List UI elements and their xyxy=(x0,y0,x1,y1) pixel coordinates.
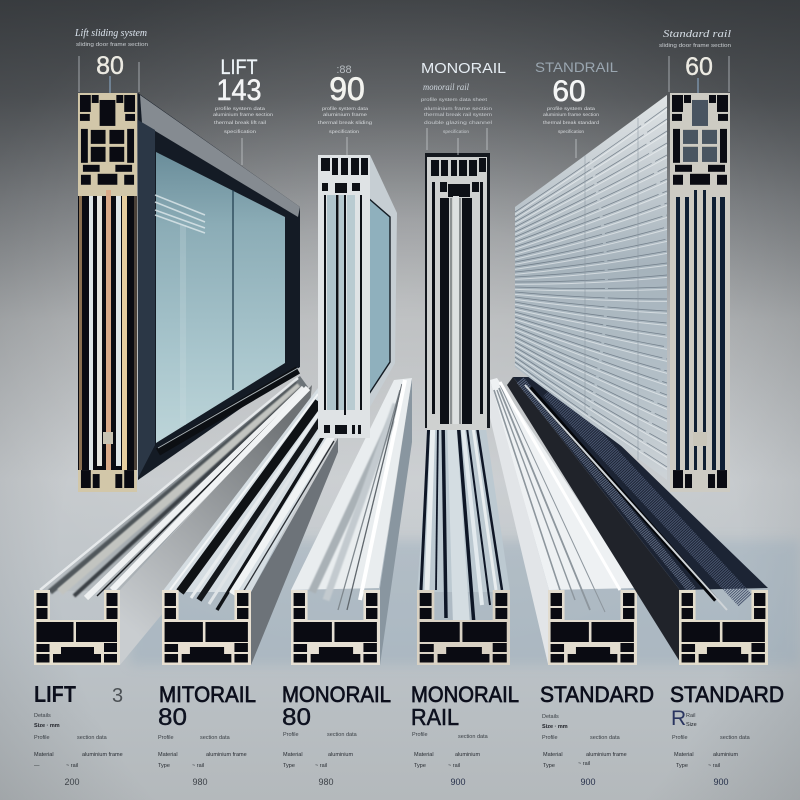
rail 2 cross-section xyxy=(162,590,251,665)
bottom label: Monorail Rail xyxy=(411,682,519,787)
window frame xyxy=(138,93,300,480)
rail 3 top surface xyxy=(291,378,412,590)
window panel: Lift 80 xyxy=(138,93,300,480)
textured wall panel xyxy=(515,95,667,480)
description: section data xyxy=(590,735,621,741)
heading: STANDARD xyxy=(670,682,784,707)
rail 1 side face xyxy=(120,385,312,665)
description: profile system data xyxy=(215,106,265,112)
bottom label: Standard R: Rail xyxy=(686,713,695,719)
heading: MONORAIL xyxy=(282,682,391,707)
description xyxy=(542,714,627,769)
rail 6 side face xyxy=(507,377,680,662)
bottom label: Monorail 80 xyxy=(282,682,391,787)
description: aluminium xyxy=(328,752,353,758)
small caption: sliding door frame section xyxy=(659,43,731,49)
description: Material xyxy=(674,752,694,758)
profile: 90 window xyxy=(318,155,397,438)
description: — xyxy=(34,763,40,769)
heading: LIFT xyxy=(220,56,258,79)
description: Type xyxy=(158,763,170,769)
number: 80 xyxy=(158,704,187,731)
description: thermal break sliding xyxy=(318,120,372,126)
description: specification xyxy=(224,129,256,135)
description: thermal break lift rail xyxy=(214,120,266,126)
top label: Standrail 60 xyxy=(535,59,618,158)
rail 4 cross-section xyxy=(417,590,510,665)
heading: STANDARD xyxy=(540,682,654,707)
description xyxy=(421,97,492,135)
rail 2 top surface xyxy=(162,388,332,592)
description: Material xyxy=(543,752,563,758)
rail 5 side face xyxy=(487,380,549,664)
description: Profile xyxy=(672,735,688,741)
side window frame xyxy=(370,155,397,407)
rail 6 cross-section xyxy=(679,590,768,665)
number: 90 xyxy=(329,71,365,107)
description: section data xyxy=(327,732,358,738)
rail 6: Standard xyxy=(507,377,768,665)
window top bevel xyxy=(140,95,300,217)
rail 4: Monorail Rail xyxy=(417,415,510,665)
rail 1 top surface xyxy=(35,376,308,592)
rail 5 cross-section xyxy=(548,590,637,665)
heading: STANDRAIL xyxy=(535,59,618,75)
top label: 80 xyxy=(74,28,148,93)
description xyxy=(34,713,123,769)
description: ~ rail xyxy=(448,763,460,769)
number: 80 xyxy=(96,52,124,80)
description: aluminium xyxy=(455,752,480,758)
bottom label: Lift: 3 xyxy=(112,685,123,707)
description: aluminium frame xyxy=(586,752,627,758)
description: Type xyxy=(543,763,555,769)
number: 60 xyxy=(552,75,586,108)
description: Profile xyxy=(34,735,50,741)
description: thermal break standard xyxy=(543,120,599,126)
description: Details xyxy=(542,714,559,720)
description: aluminium frame xyxy=(82,752,123,758)
heading: MITORAIL xyxy=(159,682,256,707)
number: 143 xyxy=(216,74,262,107)
description: section data xyxy=(720,735,751,741)
bottom label: Standard R xyxy=(670,682,784,787)
description: Material xyxy=(158,752,178,758)
profile: Standard 60 tall section xyxy=(670,93,730,492)
value: 980 xyxy=(318,777,334,787)
second line: RAIL xyxy=(411,704,459,730)
bottom label: Lift xyxy=(34,681,123,787)
description xyxy=(213,106,273,135)
description: Details xyxy=(34,713,51,719)
description: ~ rail xyxy=(708,763,720,769)
profile: Lift 80 tall section xyxy=(78,93,137,492)
value: 980 xyxy=(192,777,208,787)
description: section data xyxy=(77,735,108,741)
description: section data xyxy=(200,735,231,741)
description: section data xyxy=(458,734,489,740)
side window glass xyxy=(367,197,390,397)
heading: MONORAIL xyxy=(411,682,519,707)
value: 900 xyxy=(713,777,729,787)
description: aluminium frame section xyxy=(543,112,599,118)
top label: 90 xyxy=(318,64,372,155)
number: 60 xyxy=(685,53,713,81)
description: Material xyxy=(283,752,303,758)
script caption: monorail rail xyxy=(423,82,469,92)
description: specification xyxy=(443,129,469,135)
window glass xyxy=(156,152,285,443)
description xyxy=(412,732,489,769)
bottom label: Mitorail 80 xyxy=(158,682,256,787)
description xyxy=(543,106,599,135)
script caption: Lift sliding system xyxy=(74,28,147,39)
rail 6 top surface xyxy=(513,377,768,590)
value: 900 xyxy=(450,777,466,787)
description: aluminium frame section xyxy=(424,106,492,112)
description xyxy=(158,735,247,769)
bottom label: Standard R: Size xyxy=(686,722,697,728)
value: 900 xyxy=(580,777,596,787)
description: specification xyxy=(329,129,359,135)
description: Profile xyxy=(158,735,174,741)
description: Material xyxy=(414,752,434,758)
heading: LIFT xyxy=(34,681,76,707)
description: Type xyxy=(283,763,295,769)
profile: Monorail tall section xyxy=(425,153,490,430)
description: Profile xyxy=(412,732,428,738)
description xyxy=(672,735,751,769)
small heading: :88 xyxy=(336,64,352,76)
description: aluminium xyxy=(713,752,738,758)
description xyxy=(318,106,372,135)
description: profile system data sheet xyxy=(421,97,488,103)
description: aluminium frame xyxy=(323,112,367,118)
rail 1 cross-section xyxy=(34,590,120,665)
window sill xyxy=(158,368,298,452)
top label: Monorail xyxy=(421,60,506,155)
top label: Lift 143 xyxy=(213,56,273,165)
window side jamb xyxy=(138,120,155,478)
script caption: Standard rail xyxy=(663,29,731,40)
rail 3: Monorail 80 xyxy=(291,378,412,665)
bottom label: Standard xyxy=(540,682,654,787)
rail 2 side face xyxy=(251,438,338,665)
rail 2: Monorail 80 xyxy=(162,388,338,665)
description: ~ rail xyxy=(578,761,590,767)
description: Type xyxy=(414,763,426,769)
description: Type xyxy=(676,763,688,769)
description: ~ rail xyxy=(66,763,78,769)
description: specification xyxy=(558,129,584,135)
top label: right 60 xyxy=(659,29,731,93)
number: 80 xyxy=(282,704,311,731)
description: profile system data xyxy=(322,106,368,112)
rail 3 side face xyxy=(380,378,412,665)
second line: R xyxy=(671,707,686,730)
description: thermal break rail system xyxy=(424,112,492,118)
description: ~ rail xyxy=(192,763,204,769)
description: double glazing channel xyxy=(424,120,492,126)
description: aluminium frame section xyxy=(213,112,273,118)
tall section xyxy=(318,155,370,438)
rail 4 top surface xyxy=(417,415,510,592)
description: Profile xyxy=(283,732,299,738)
rail 3 cross-section xyxy=(291,590,380,665)
description: Size · mm xyxy=(34,723,60,729)
description: Size · mm xyxy=(542,724,568,730)
description xyxy=(283,732,358,769)
description: ~ rail xyxy=(315,763,327,769)
description: aluminium frame xyxy=(206,752,247,758)
rail 5: Standard xyxy=(487,378,637,665)
small caption: sliding door frame section xyxy=(76,42,148,48)
rail 5 top surface xyxy=(490,378,636,590)
description: Material xyxy=(34,752,54,758)
rail 1: Lift xyxy=(34,376,312,665)
value: 200 xyxy=(64,777,80,787)
heading: MONORAIL xyxy=(421,60,506,77)
description: Profile xyxy=(542,735,558,741)
description: profile system data xyxy=(547,106,595,112)
